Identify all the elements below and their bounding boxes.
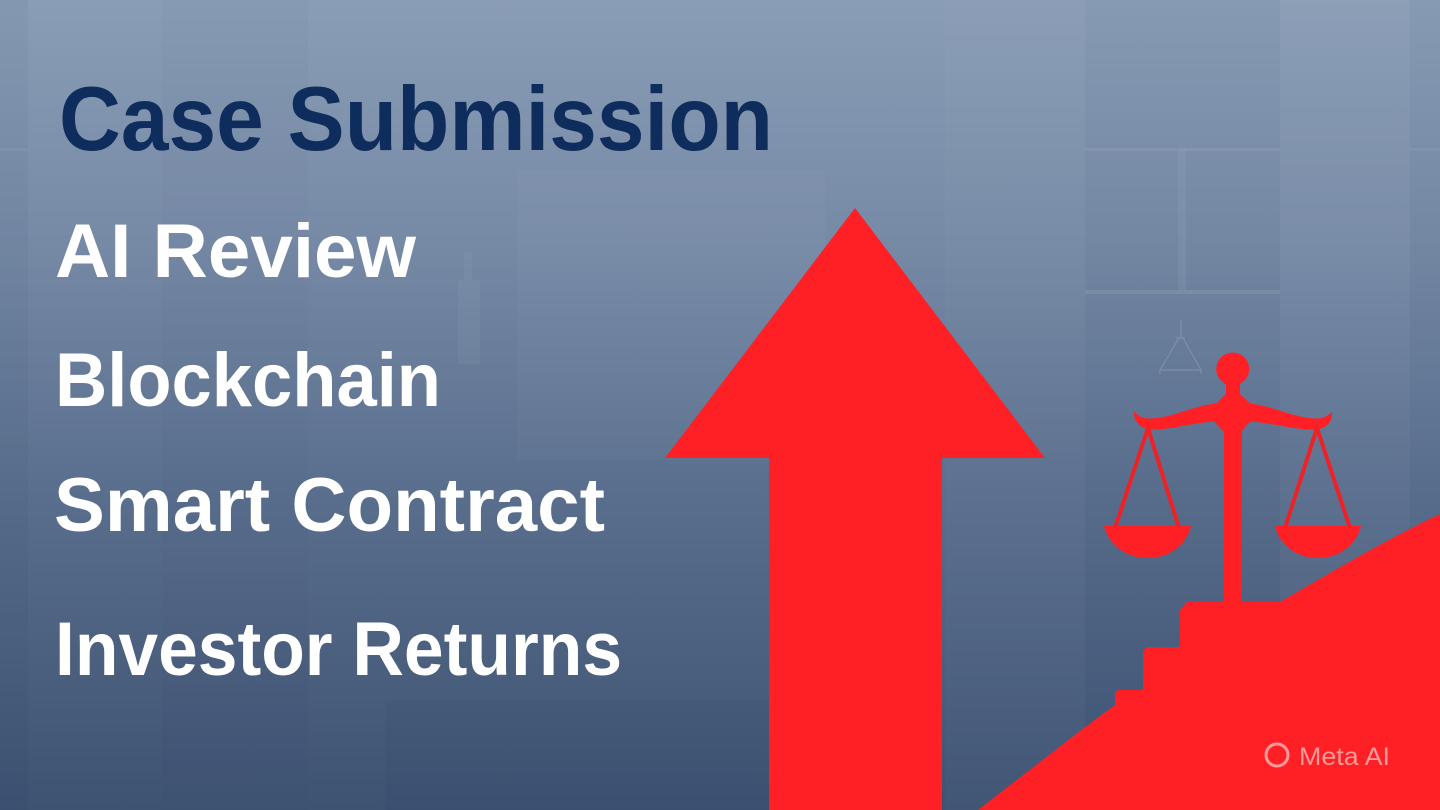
staircase hill xyxy=(978,514,1440,810)
step: Investor Returns: Investor Returns xyxy=(55,607,622,692)
step: AI Review: AI Review xyxy=(55,209,417,294)
scales post and ball xyxy=(1224,428,1242,606)
step: Smart Contract: Smart Contract xyxy=(54,463,605,548)
arrow: red upward arrow xyxy=(665,208,1045,810)
title: Case Submission: Case Submission xyxy=(59,69,773,170)
scales beam xyxy=(1134,382,1332,431)
right pan xyxy=(1275,526,1361,558)
watermark: Meta AI xyxy=(1266,743,1390,771)
left pan xyxy=(1104,526,1191,558)
pan strings xyxy=(1115,428,1350,528)
icon: faint bottle silhouette xyxy=(458,252,480,364)
icon: faint triangle compass xyxy=(1160,320,1201,374)
watermark: Meta AI: Meta AI xyxy=(1299,743,1390,771)
step: Blockchain: Blockchain xyxy=(55,338,441,423)
icon: scales of justice xyxy=(1104,352,1361,606)
